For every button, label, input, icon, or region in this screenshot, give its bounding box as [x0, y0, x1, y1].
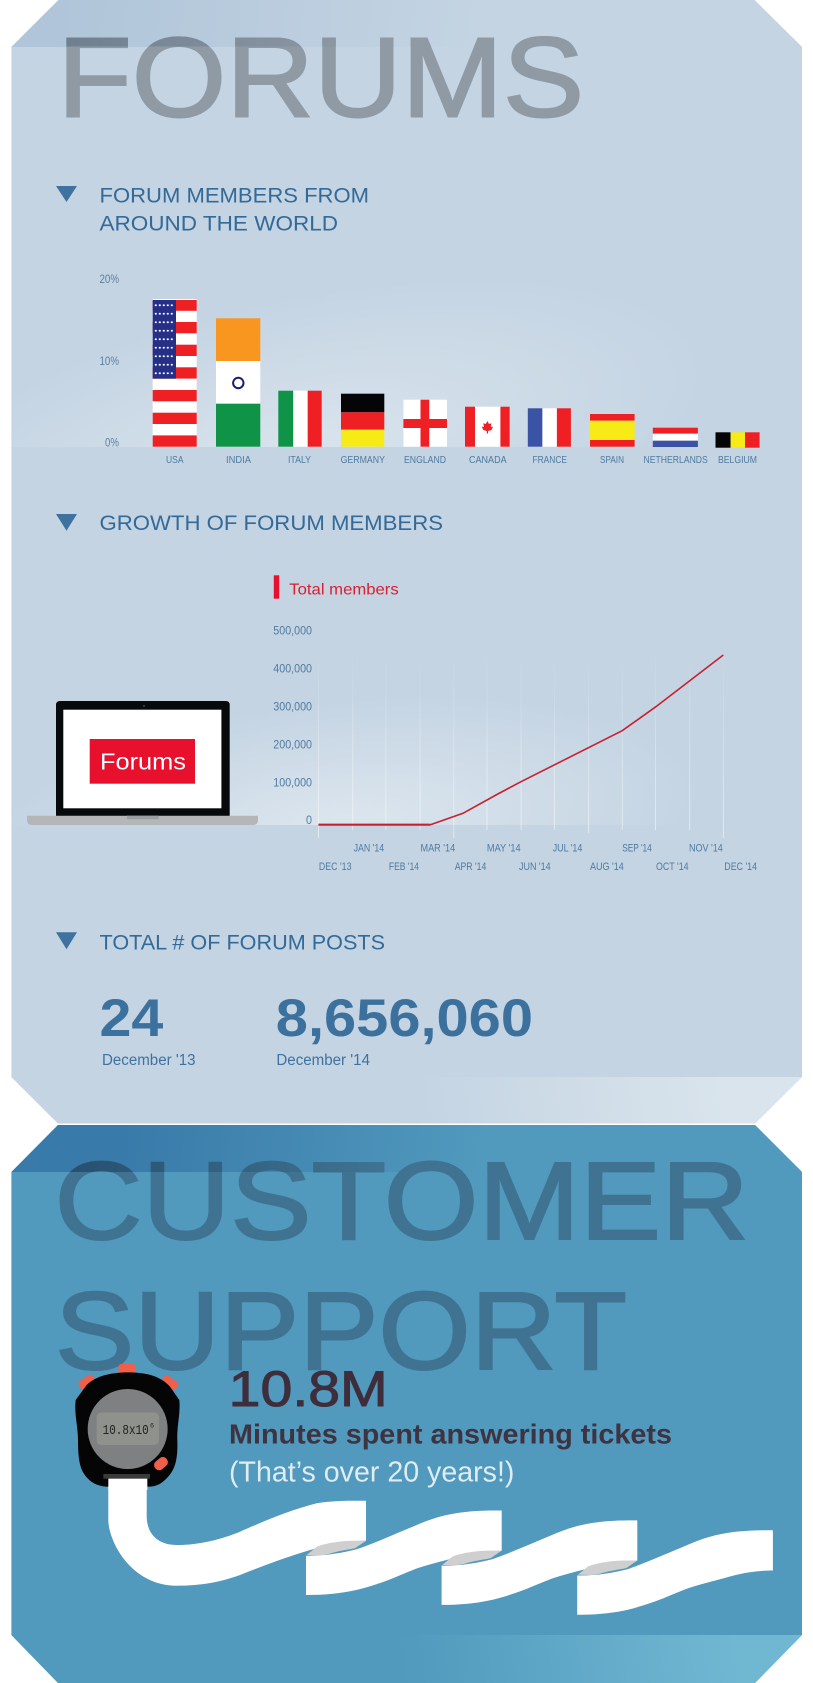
callout: minutes answering tickets — [229, 1361, 672, 1489]
ribbon: paper tape — [108, 1478, 773, 1615]
x axis labels: OCT '14 — [656, 861, 689, 873]
y axis labels: 0% — [105, 438, 119, 450]
country labels: NETHERLANDS — [644, 454, 708, 466]
bar: France — [528, 408, 571, 447]
legend: Total members — [289, 581, 399, 598]
country labels: ENGLAND — [404, 454, 446, 466]
title: forums: FORUMS — [58, 14, 584, 140]
x axis labels: AUG '14 — [590, 861, 624, 873]
country labels: FRANCE — [532, 454, 567, 466]
country labels: BELGIUM — [718, 454, 757, 466]
x axis labels: DEC '13 — [319, 861, 352, 873]
heading: total forum posts: TOTAL # OF FORUM POSTS — [100, 931, 385, 954]
stat: December 2013 posts — [100, 989, 196, 1069]
stat: December 2013 posts: 24 — [100, 989, 164, 1048]
bar: Belgium — [716, 432, 760, 448]
x axis labels: MAY '14 — [487, 842, 521, 854]
title: customer support: CUSTOMER — [54, 1140, 749, 1263]
panel: forums — [11, 0, 802, 1124]
y axis labels: 300,000 — [273, 699, 312, 713]
y axis labels: 10% — [100, 356, 119, 368]
stat: December 2013 posts: December '13 — [102, 1052, 196, 1069]
stat: December 2014 posts: December '14 — [276, 1052, 370, 1069]
heading: forum members: FORUM MEMBERS FROM — [100, 185, 369, 208]
bar: Canada — [465, 407, 510, 447]
heading: growth of forum members: GROWTH OF FORUM MEMBERS — [100, 512, 443, 535]
country labels: ITALY — [288, 454, 311, 466]
title: forums: FORUMS — [58, 14, 584, 140]
country labels: GERMANY — [341, 454, 385, 466]
country labels: SPAIN — [600, 454, 624, 466]
callout: minutes answering tickets: 10.8M — [229, 1361, 388, 1417]
country labels: INDIA — [226, 454, 251, 466]
bar chart: members by country — [100, 274, 760, 466]
icon: stopwatch: 6 — [150, 1422, 154, 1430]
x axis labels: DEC '14 — [724, 861, 757, 873]
country labels: USA — [166, 454, 184, 466]
legend — [274, 575, 399, 599]
icon: laptop — [27, 701, 258, 825]
y axis labels: 200,000 — [273, 737, 312, 751]
bar: Spain — [590, 414, 635, 447]
bar: England — [403, 400, 447, 447]
x axis labels: NOV '14 — [689, 842, 723, 854]
y axis labels — [273, 623, 312, 827]
title: customer support: SUPPORT — [55, 1270, 627, 1393]
y axis labels: 400,000 — [273, 661, 312, 675]
x axis labels: FEB '14 — [389, 861, 419, 873]
bar: Germany — [341, 394, 384, 447]
bar: Netherlands — [653, 428, 698, 447]
bar: Italy — [278, 391, 322, 447]
x axis labels: JUN '14 — [519, 861, 551, 873]
y axis labels: 500,000 — [273, 623, 312, 637]
x axis labels — [319, 842, 757, 873]
country labels: CANADA — [469, 454, 507, 466]
stat: December 2014 posts: 8,656,060 — [276, 989, 533, 1048]
growth line — [318, 655, 723, 825]
icon: stopwatch: 10.8x10 — [103, 1423, 149, 1439]
title: customer support: CUSTOMER — [54, 1140, 749, 1263]
y axis labels — [100, 274, 119, 450]
x axis labels: JUL '14 — [553, 842, 582, 854]
icon: stopwatch — [75, 1364, 180, 1490]
title: forums — [66, 36, 580, 118]
heading: forum members: AROUND THE WORLD — [100, 213, 338, 236]
bar: USA — [153, 299, 197, 447]
country labels — [166, 454, 757, 466]
line chart: total members — [273, 575, 757, 873]
panel: customer support — [11, 1125, 802, 1683]
heading: forum members — [56, 185, 369, 236]
callout: minutes answering tickets: Minutes spent answering tickets — [229, 1418, 672, 1449]
x axis labels: APR '14 — [455, 861, 486, 873]
y axis labels: 0 — [306, 813, 312, 827]
x axis labels: JAN '14 — [354, 842, 384, 854]
bar: India — [216, 318, 260, 447]
stat: December 2014 posts — [276, 989, 533, 1069]
y axis labels: 20% — [100, 274, 119, 286]
x axis labels: MAR '14 — [420, 842, 455, 854]
icon: laptop: Forums — [100, 748, 186, 774]
x axis labels: SEP '14 — [622, 842, 652, 854]
callout: minutes answering tickets: (That’s over 20 years!) — [229, 1457, 514, 1489]
y axis labels: 100,000 — [273, 775, 312, 789]
title: customer support — [59, 1160, 746, 1371]
